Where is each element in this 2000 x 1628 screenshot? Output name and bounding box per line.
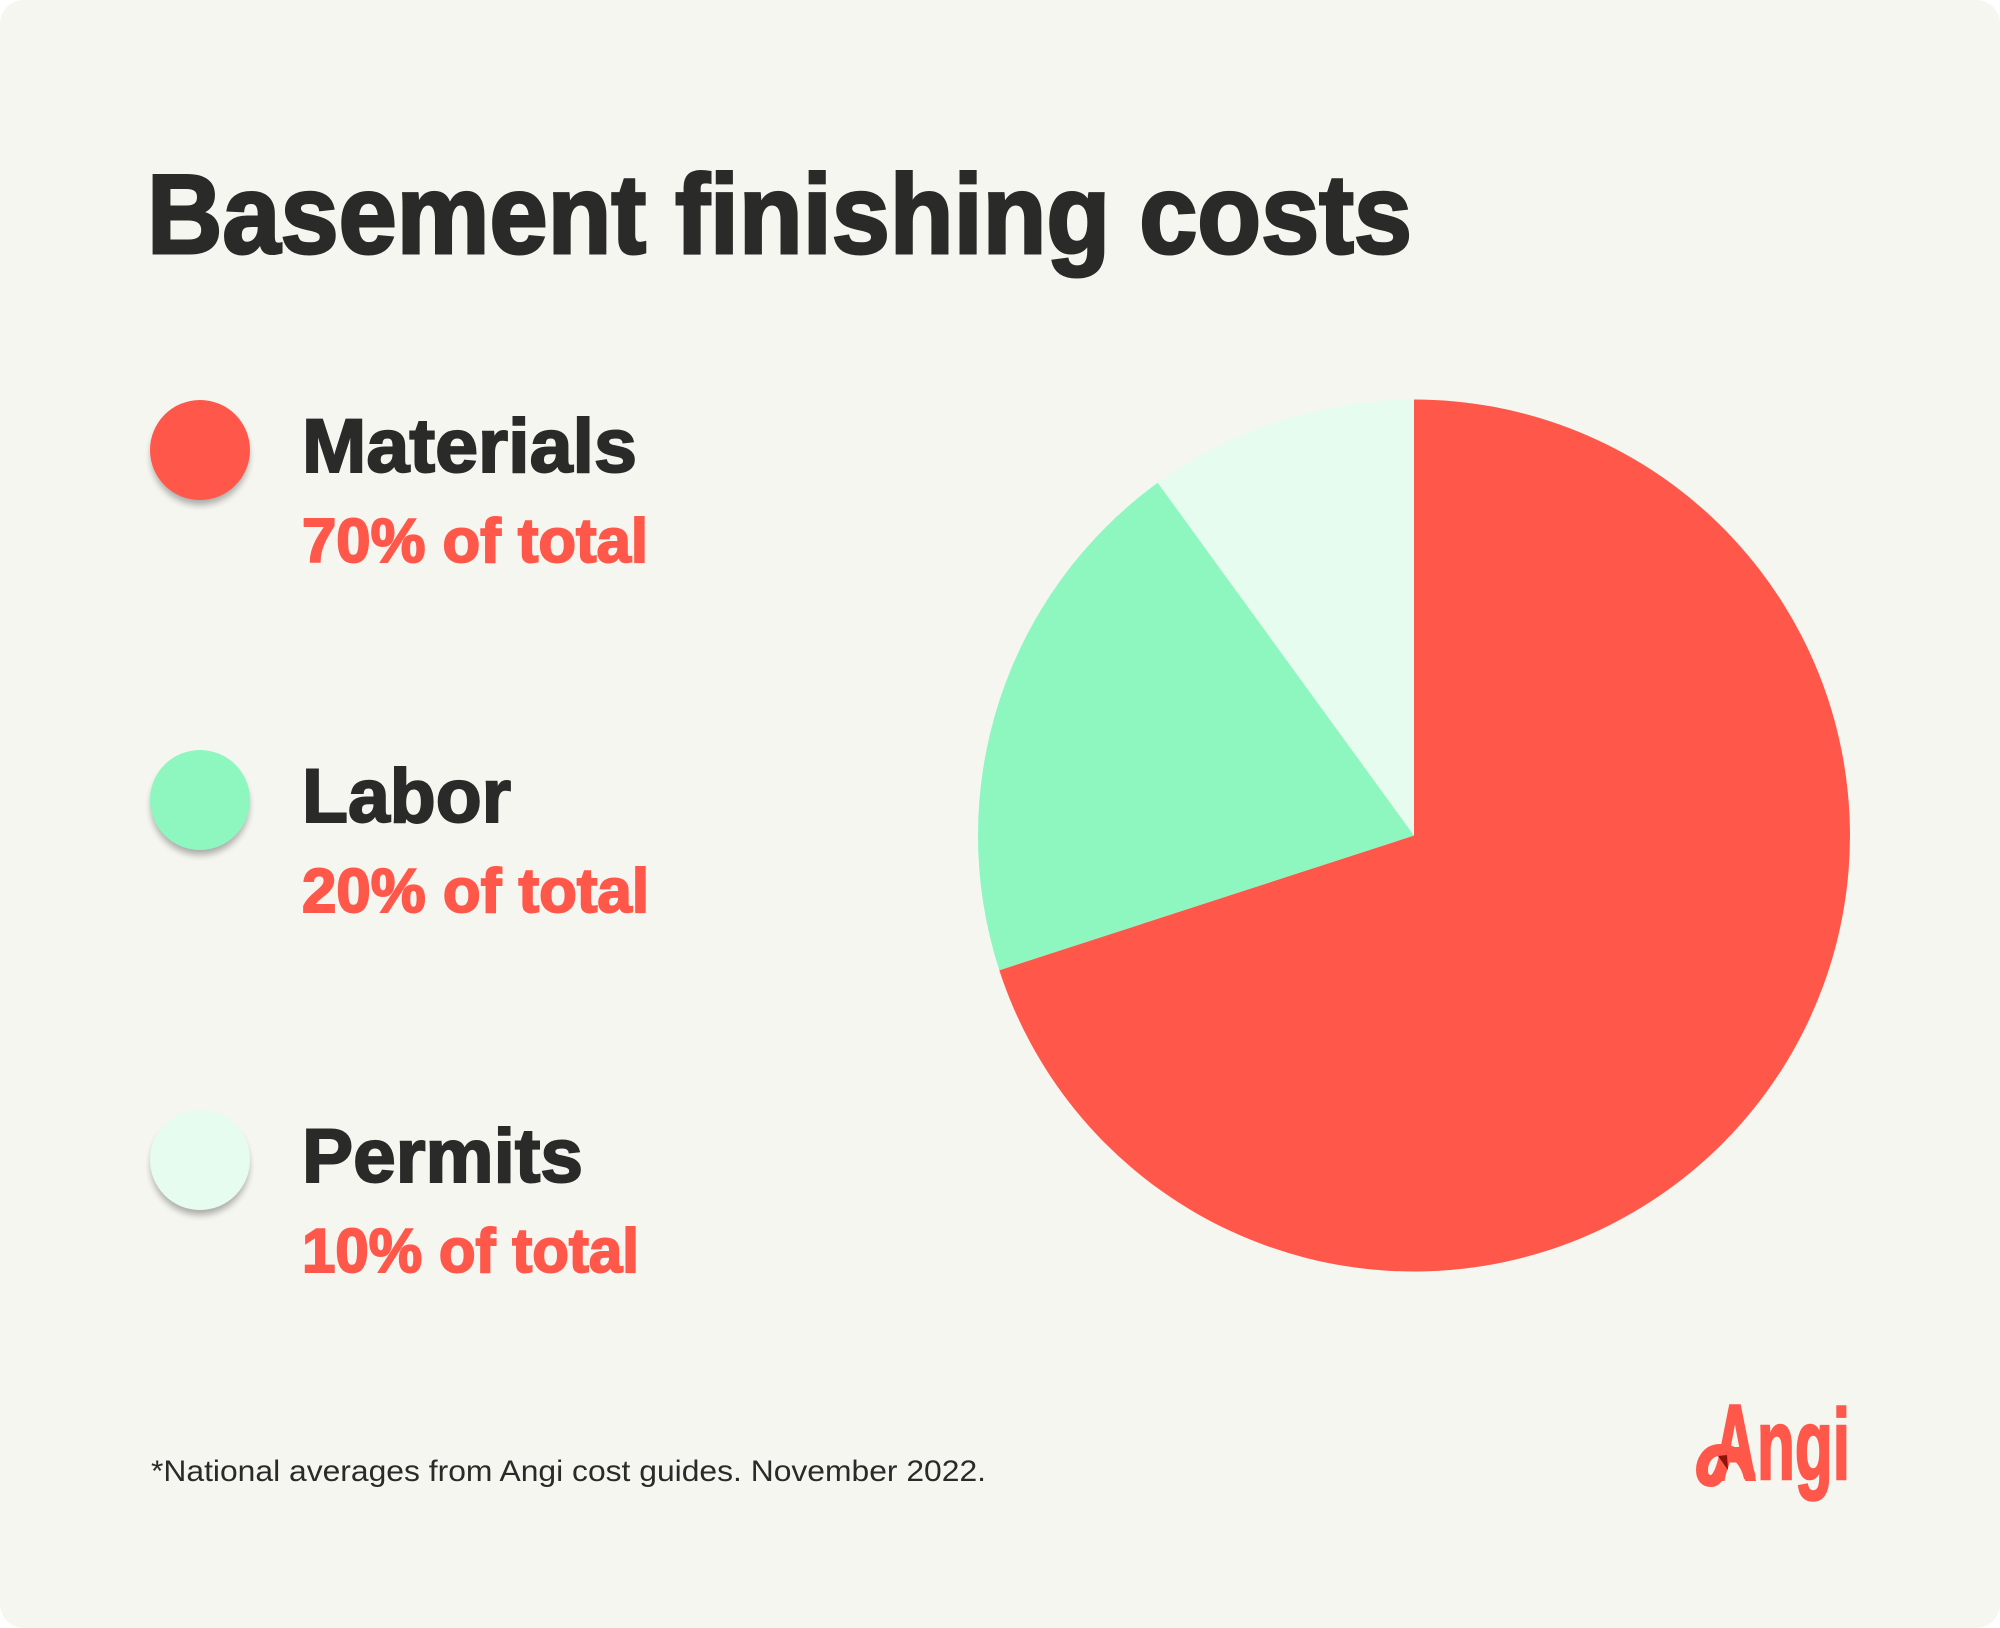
slice: permits 10%	[1158, 400, 1414, 836]
value: materials share: 70% of total	[302, 507, 648, 576]
logo: Angi	[1702, 1384, 1850, 1502]
icon: labor swatch	[150, 750, 250, 855]
title: Basement finishing costs	[147, 152, 1412, 277]
pie chart	[978, 400, 1850, 1272]
label: permits: Permits	[302, 1114, 583, 1199]
logo: Angi: A	[1714, 1384, 1756, 1502]
logo: Angi: ngi	[1757, 1389, 1850, 1501]
value: labor share: 20% of total	[302, 857, 649, 926]
legend: materials	[150, 400, 648, 576]
value: permits share: 10% of total	[302, 1217, 639, 1286]
icon: materials swatch	[150, 400, 250, 505]
label: materials: Materials	[302, 404, 637, 489]
footnote: *National averages from Angi cost guides. November 2022.	[151, 1455, 986, 1488]
label: labor: Labor	[302, 754, 511, 839]
icon: permits swatch	[150, 1110, 250, 1215]
slice: materials 70%	[999, 400, 1850, 1272]
legend: permits	[150, 1110, 639, 1286]
slice: labor 20%	[978, 483, 1414, 970]
legend: labor	[150, 750, 649, 926]
